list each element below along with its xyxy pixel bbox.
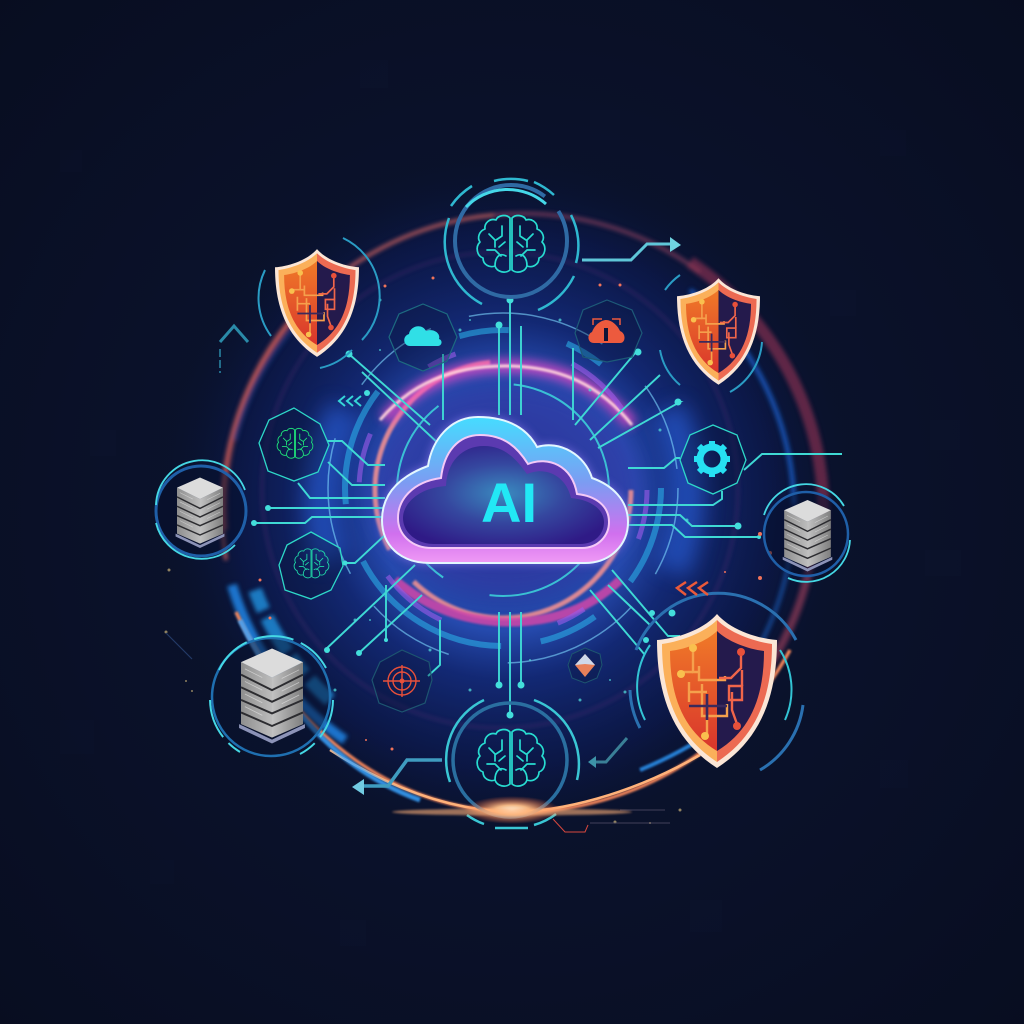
brain node: top bbox=[445, 179, 578, 310]
cloud inner panel bbox=[403, 446, 604, 544]
octagon: gear bbox=[680, 425, 746, 494]
central blue glow bbox=[160, 155, 850, 845]
server node: left bbox=[156, 460, 246, 559]
bottom flare bbox=[392, 796, 632, 824]
arrow: bottom right bbox=[588, 738, 627, 768]
inner rings around cloud bbox=[328, 313, 678, 663]
octagon: diamond icon bbox=[568, 648, 602, 683]
particles bbox=[164, 276, 772, 832]
cloud pale inner stroke bbox=[398, 435, 609, 548]
shield: top right bbox=[660, 275, 762, 392]
cloud centre: AI bbox=[382, 417, 628, 563]
chevrons: orange bbox=[677, 582, 708, 595]
connector nodes bbox=[251, 296, 761, 718]
octagon: green brain bbox=[259, 408, 329, 481]
octagon: target icon bbox=[372, 650, 432, 712]
AI label: AI bbox=[481, 471, 537, 534]
arrow: top left dashed bbox=[220, 326, 248, 373]
cloud glow bbox=[382, 417, 628, 563]
shield: large bottom right bbox=[630, 593, 803, 770]
server node: right bbox=[764, 484, 850, 582]
cloud outer body bbox=[382, 417, 628, 563]
arrow: bottom left bbox=[352, 760, 442, 795]
server node: large left bbox=[210, 636, 333, 756]
octagon: teal brain bbox=[279, 532, 343, 599]
outer orbit rings bbox=[222, 214, 823, 812]
octagon: cloud icon cyan bbox=[389, 304, 457, 371]
arrow: top right bbox=[582, 237, 681, 260]
brain node: bottom bbox=[446, 700, 579, 828]
octagon: cloud icon orange bbox=[575, 300, 642, 362]
shield: top left bbox=[259, 238, 380, 368]
faint background squares bbox=[60, 60, 961, 946]
circuit connection lines bbox=[254, 300, 842, 715]
chevrons: cyan bbox=[339, 396, 361, 406]
